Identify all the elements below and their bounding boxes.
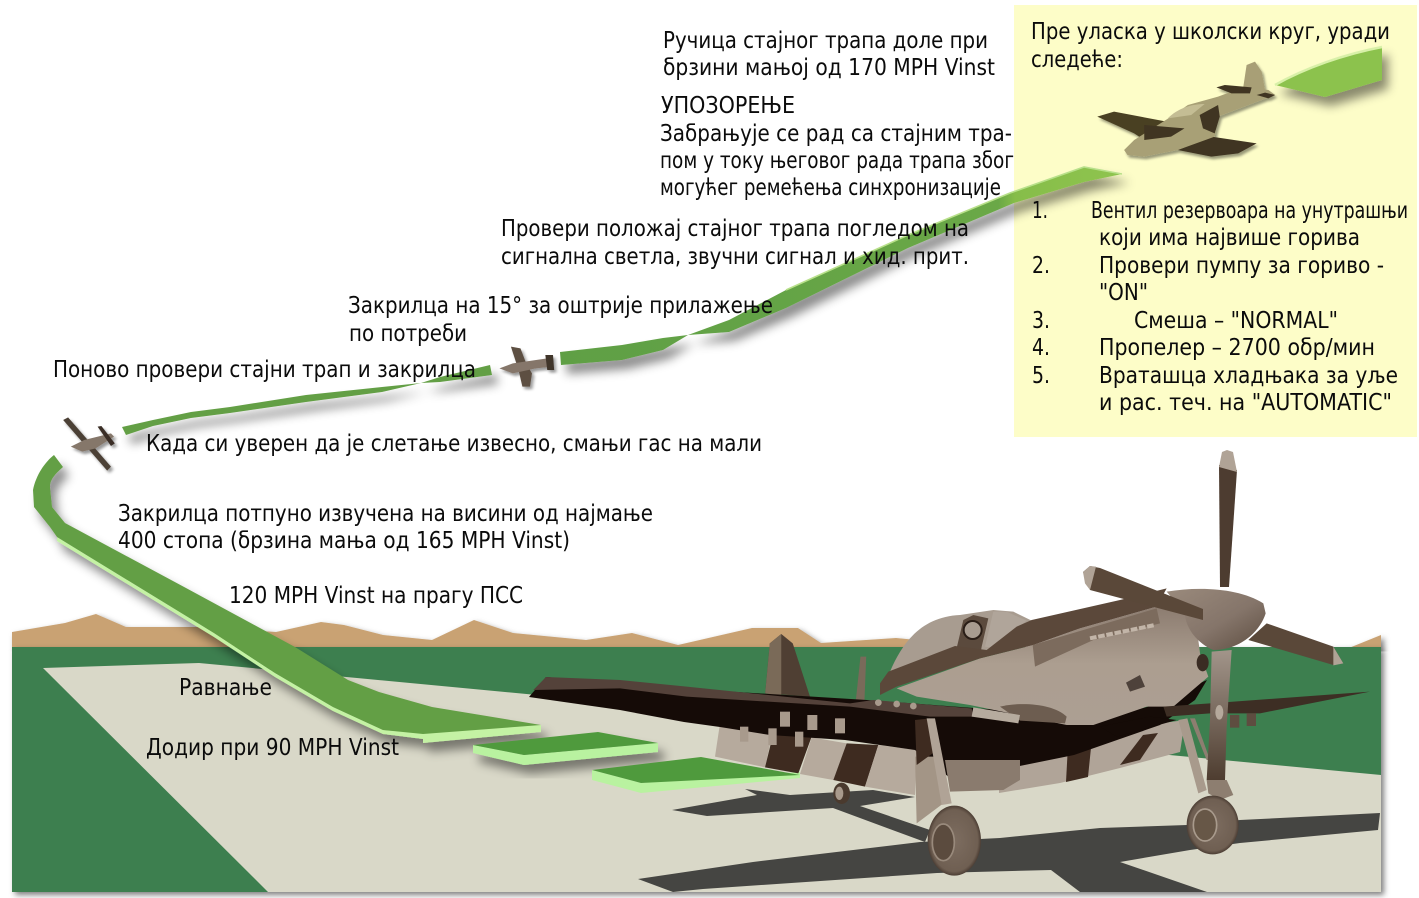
tail fin [765,634,866,700]
grass field [12,647,1381,892]
warning text: пом у току његовог рада трапа због [660,148,1014,174]
right wing [1163,692,1370,717]
full flaps text: Закрилца потпуно извучена на висини од најмање [118,501,653,527]
fuselage [880,588,1209,725]
right gear struts [1178,718,1207,793]
wing fillet [1000,704,1067,723]
tail wheel [833,783,850,804]
left blade [1083,566,1203,620]
approach ribbon: base leg [122,365,492,435]
approach ribbon: final descent [33,455,541,743]
gear check text: сигнална светла, звучни сигнал и хид. прит. [501,244,969,270]
body [897,603,1208,725]
main plane: P-51 Mustang on the runway [529,450,1380,892]
checklist items: 5. [1032,363,1050,389]
belly scoop [945,760,1020,792]
threshold speed text: 120 MPH Vinst на прагу ПСС [229,583,523,609]
heading: gear handle note: Ручица стајног трапа доле при [663,28,988,54]
gear door [1207,780,1233,800]
recheck text: Поново провери стајни трап и закрилца [53,357,476,383]
plane shadow on ground [638,789,1380,892]
icon: plane in turn [63,417,115,471]
main wheel [928,806,981,876]
mountains [12,614,1381,650]
ground scene [12,614,1381,892]
ribbon surface [33,455,541,734]
radio panel [1126,675,1145,692]
gear door [915,757,943,823]
left wing top and gear [533,677,1020,876]
heading: gear handle note [663,28,995,81]
gear strut [927,718,952,805]
checklist items: 4. [1032,335,1050,361]
right wing and gear [1083,566,1370,854]
checklist items: и рас. теч. на "AUTOMATIC" [1099,390,1392,416]
flare text: Равнање [179,675,272,701]
underwing pylons [740,712,845,747]
warning text [660,93,1014,201]
gear check text [501,216,969,270]
icon: plane on base leg [499,347,554,387]
checklist items: Пропелер – 2700 обр/мин [1099,335,1375,361]
checklist items: 2. [1032,253,1050,279]
rear canopy [890,610,1032,672]
full flaps text: 400 стопа (брзина мања од 165 MPH Vinst) [118,528,570,554]
ribbon light edge [786,167,1122,290]
wing top surface [533,677,973,717]
panel: pre-pattern checklist background [1014,5,1417,437]
full flaps text [118,501,653,554]
windscreen [985,612,1027,647]
right wheel [1187,796,1239,854]
approach ribbon: entry [1275,47,1382,97]
checklist heading: следеће: [1031,47,1123,73]
icon: plane in checklist panel [1097,62,1275,157]
flaps 15 text: Закрилца на 15° за оштрије прилажење [348,293,773,319]
white wing stripe [972,707,1020,723]
checklist heading [1031,19,1390,73]
checklist items: Провери пумпу за гориво - [1099,253,1384,279]
right blade [1248,623,1343,665]
checklist items [1032,198,1408,416]
touchdown slab 1 [473,732,658,765]
checklist items: Смеша – "NORMAL" [1134,308,1338,334]
top propeller blade [1219,450,1237,587]
exhaust stacks [1090,625,1155,638]
gear check text: Провери положај стајног трапа погледом на [501,216,969,242]
wing underside [529,677,1207,790]
heading: gear handle note: брзини мањој од 170 MPH Vinst [663,55,995,81]
checklist items: 1. [1032,198,1048,224]
ribbon surface [560,167,1122,365]
dark spine [880,588,1167,695]
warning text: УПОЗОРЕЊЕ [661,93,795,119]
flaps 15 text: по потреби [349,321,467,347]
canopy arch [955,615,988,657]
spinner [1167,589,1266,650]
invasion stripes [715,723,773,767]
oil cooler opening [1197,654,1209,671]
lower blade [1207,650,1232,780]
checklist items: који има највише горива [1099,225,1360,251]
approach ribbon: downwind [560,167,1122,365]
touchdown slab 2 [592,757,800,793]
warning text: могућег ремећења синхронизације [660,175,1001,201]
lower wing and stripes [715,723,917,795]
throttle text: Када си уверен да је слетање извесно, смањи гас на мали [146,431,762,457]
right side invasion stripes [999,720,1185,793]
exhaust panel [1033,608,1160,667]
gun ports [875,699,917,709]
checklist items: 3. [1032,308,1050,334]
flaps 15 text [348,293,773,347]
touchdown text: Додир при 90 MPH Vinst [146,735,399,761]
wing pylons [1230,713,1256,728]
ribbon rim [57,537,541,743]
runway [43,663,1381,892]
warning text: Забрањује се рад са стајним тра- [660,121,1012,147]
checklist items: "ON" [1099,280,1148,306]
